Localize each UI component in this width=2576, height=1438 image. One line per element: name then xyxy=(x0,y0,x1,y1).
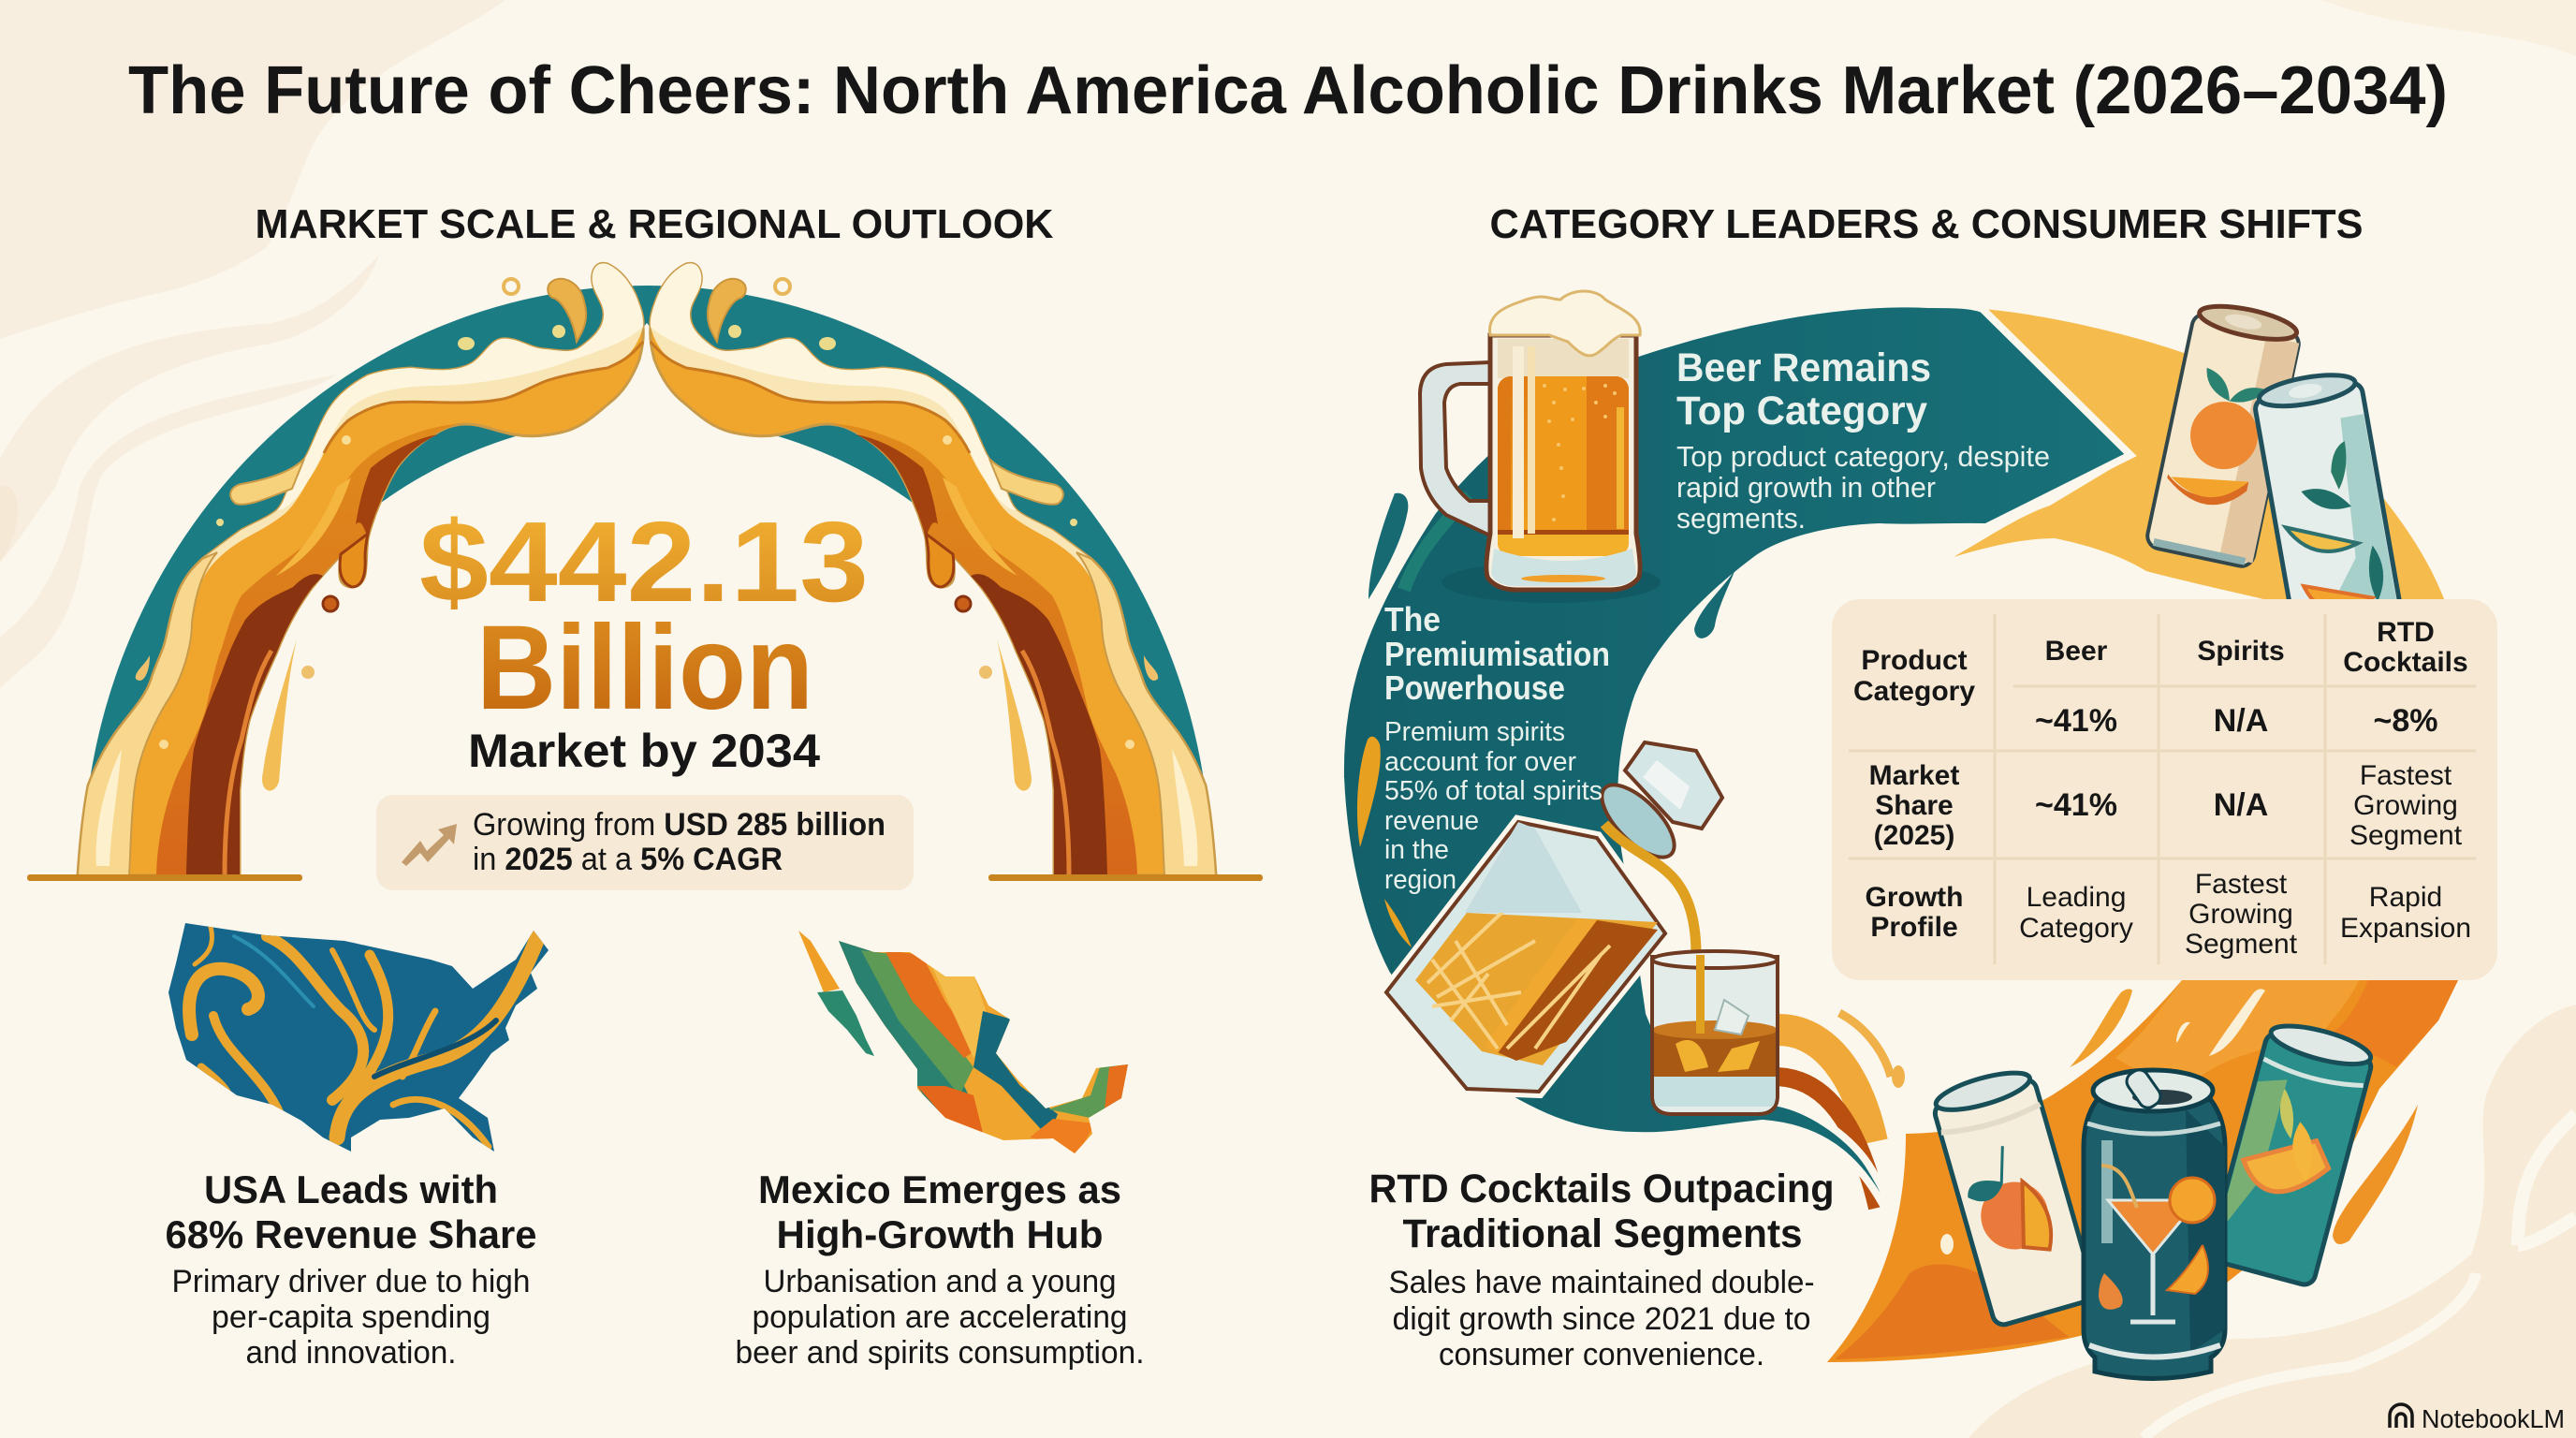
text block: beer remains: segments. xyxy=(1676,502,1806,535)
caption: Market by 2034 xyxy=(468,725,820,777)
foam xyxy=(1490,291,1640,356)
map: USA xyxy=(168,923,549,1152)
row: growth profile: Growing xyxy=(2188,899,2293,930)
text block: Mexico: Mexico Emerges as xyxy=(758,1167,1121,1211)
text block: USA leads xyxy=(165,1167,537,1371)
row: growth profile: Segment xyxy=(2185,929,2298,960)
value: $442.13 xyxy=(419,498,869,625)
row: growth profile: Fastest xyxy=(2195,869,2288,900)
brand mark: NotebookLM: NotebookLM xyxy=(2422,1404,2565,1433)
heading: category leaders: CATEGORY LEADERS & CONSUMER SHIFTS xyxy=(1490,201,2363,247)
row: product category: Cocktails xyxy=(2343,647,2468,678)
arch: left beer stream xyxy=(78,263,643,875)
text block: USA leads: and innovation. xyxy=(245,1335,457,1371)
row: market share: Fastest xyxy=(2360,760,2452,791)
text block: RTD cocktails: consumer convenience. xyxy=(1439,1337,1764,1372)
cocktail glass xyxy=(2108,1200,2198,1255)
bubbles xyxy=(1543,384,1617,521)
text block: USA leads: 68% Revenue Share xyxy=(165,1212,537,1256)
text block: RTD cocktails xyxy=(1368,1167,1835,1372)
icon: rising arrow xyxy=(402,824,457,866)
swoosh: teal arrow xyxy=(1340,303,2130,1222)
pale edge xyxy=(78,552,217,875)
icon: upper cans xyxy=(2145,299,2409,677)
row: growth profile: Leading xyxy=(2027,882,2126,913)
text block: Mexico: High-Growth Hub xyxy=(777,1212,1103,1256)
row: market share: ~41% xyxy=(2035,787,2117,823)
arch: right base line xyxy=(988,874,1263,881)
can: peach xyxy=(2145,299,2304,568)
text block: RTD cocktails: Sales have maintained double- xyxy=(1389,1265,1814,1300)
text block: premiumisation: Premiumisation xyxy=(1384,635,1610,673)
arch: right beer stream xyxy=(651,263,1216,875)
row: product category: Spirits xyxy=(2197,636,2285,667)
can: mint xyxy=(2251,368,2409,677)
handle xyxy=(1420,362,1490,536)
row: product category: N/A xyxy=(2214,703,2268,739)
icon: lower cans xyxy=(1929,1018,2377,1378)
callout: growth pill: in 2025 at a 5% CAGR xyxy=(473,842,783,877)
text block: RTD cocktails: Traditional Segments xyxy=(1402,1211,1803,1256)
row: market share xyxy=(1869,760,2463,851)
row: market share: Share xyxy=(1875,790,1954,821)
row: product category: RTD xyxy=(2377,617,2435,648)
text block: beer remains: Top Category xyxy=(1676,389,1927,433)
text block: Mexico xyxy=(736,1167,1144,1371)
heading: market scale: MARKET SCALE & REGIONAL OUTLOOK xyxy=(255,201,1054,247)
row: product category: Product xyxy=(1861,645,1968,676)
text block: Mexico: Urbanisation and a young xyxy=(764,1264,1116,1299)
arch: teal band xyxy=(82,286,1211,875)
text block: Mexico: beer and spirits consumption. xyxy=(736,1335,1144,1371)
foam lower xyxy=(202,327,643,580)
upper brown xyxy=(356,434,438,538)
stopper xyxy=(1625,742,1722,829)
can: left cream xyxy=(1929,1064,2097,1328)
row: growth profile: Profile xyxy=(1870,912,1958,943)
swirl: behind glass xyxy=(1535,1009,1905,1208)
callout: growth pill xyxy=(376,795,914,890)
text block: premiumisation: Powerhouse xyxy=(1384,668,1565,707)
head tint xyxy=(1498,339,1629,378)
row: market share: Growing xyxy=(2353,790,2458,821)
text block: USA leads: Primary driver due to high xyxy=(172,1264,530,1299)
text block: premiumisation: account for over xyxy=(1384,747,1576,777)
text block: USA leads: USA Leads with xyxy=(204,1167,498,1211)
icon: decanter xyxy=(1386,742,1722,1092)
text block: USA leads: per-capita spending xyxy=(212,1299,490,1335)
row: growth profile: Rapid xyxy=(2369,882,2442,913)
swoosh: yellow upper xyxy=(1954,309,2446,604)
swoosh: orange lower xyxy=(1827,980,2458,1362)
row: growth profile: Category xyxy=(2019,913,2133,944)
row: market share: Segment xyxy=(2349,820,2463,851)
streak: amber right xyxy=(2333,1105,2418,1244)
streak: amber upper xyxy=(2070,989,2132,1067)
row: product category: Beer xyxy=(2045,636,2108,667)
collar xyxy=(1590,773,1686,869)
icon: notebook arcs xyxy=(2390,1404,2412,1428)
can: right teal xyxy=(2207,1018,2377,1287)
text block: premiumisation: region xyxy=(1384,865,1456,895)
liquid xyxy=(1415,822,1658,1065)
row: product category xyxy=(1853,617,2468,739)
stat: market value xyxy=(419,498,869,777)
body xyxy=(1386,822,1665,1092)
map: Mexico xyxy=(798,931,1128,1153)
growth text: Growing from USD 285 billion xyxy=(473,807,886,843)
arch: left base line xyxy=(27,874,302,881)
beer xyxy=(1498,376,1629,556)
text block: beer remains xyxy=(1676,345,2050,535)
glass xyxy=(1486,335,1640,590)
text block: premiumisation: in the xyxy=(1384,835,1449,865)
glass base xyxy=(1491,549,1636,586)
panel: data table xyxy=(1832,599,2497,980)
row: product category: Category xyxy=(1853,676,1975,707)
text block: beer remains: rapid growth in other xyxy=(1676,471,1936,504)
text block: RTD cocktails: digit growth since 2021 due to xyxy=(1393,1301,1810,1337)
mug shadow xyxy=(1442,562,1661,603)
amber top line xyxy=(450,342,643,403)
unit: Billion xyxy=(476,601,813,735)
row: market share: (2025) xyxy=(1874,820,1954,851)
row: growth profile: Expansion xyxy=(2340,913,2471,944)
table grid xyxy=(1849,614,2476,964)
foam drip blob xyxy=(230,459,304,505)
foam upper xyxy=(277,263,643,510)
teal drips xyxy=(1357,493,1735,947)
icon: whisky glass xyxy=(1652,951,1778,1114)
panel: category flow xyxy=(1340,303,2458,1362)
icon: beer mug xyxy=(1420,291,1640,590)
drip tip xyxy=(340,534,368,587)
orange layer xyxy=(156,424,466,875)
pour stream xyxy=(1604,824,1704,1033)
row: growth profile xyxy=(1865,869,2471,960)
title: The Future of Cheers: North America Alcoholic Drinks Market (2026–2034) xyxy=(128,53,2448,128)
text block: RTD cocktails: RTD Cocktails Outpacing xyxy=(1368,1167,1835,1211)
brown layer xyxy=(186,574,323,875)
text block: premiumisation: The xyxy=(1384,600,1441,638)
panel: market arch xyxy=(27,263,1263,881)
row: product category: ~8% xyxy=(2374,703,2437,739)
text block: premiumisation: 55% of total spirits xyxy=(1384,776,1603,806)
row: market share: N/A xyxy=(2214,787,2268,823)
row: growth profile: Growth xyxy=(1865,882,1964,913)
amber inner streak xyxy=(276,477,351,576)
text block: premiumisation: revenue xyxy=(1384,806,1479,836)
can: centre teal xyxy=(2084,1066,2225,1378)
row: product category: ~41% xyxy=(2035,703,2117,739)
text block: beer remains: Top product category, despite xyxy=(1676,440,2050,473)
text block: Mexico: population are accelerating xyxy=(753,1299,1127,1335)
Baja peninsula xyxy=(798,931,840,992)
text block: beer remains: Beer Remains xyxy=(1676,345,1931,390)
text block: premiumisation: Premium spirits xyxy=(1384,717,1565,747)
row: market share: Market xyxy=(1869,760,1959,791)
text block: premiumisation xyxy=(1384,600,1610,895)
